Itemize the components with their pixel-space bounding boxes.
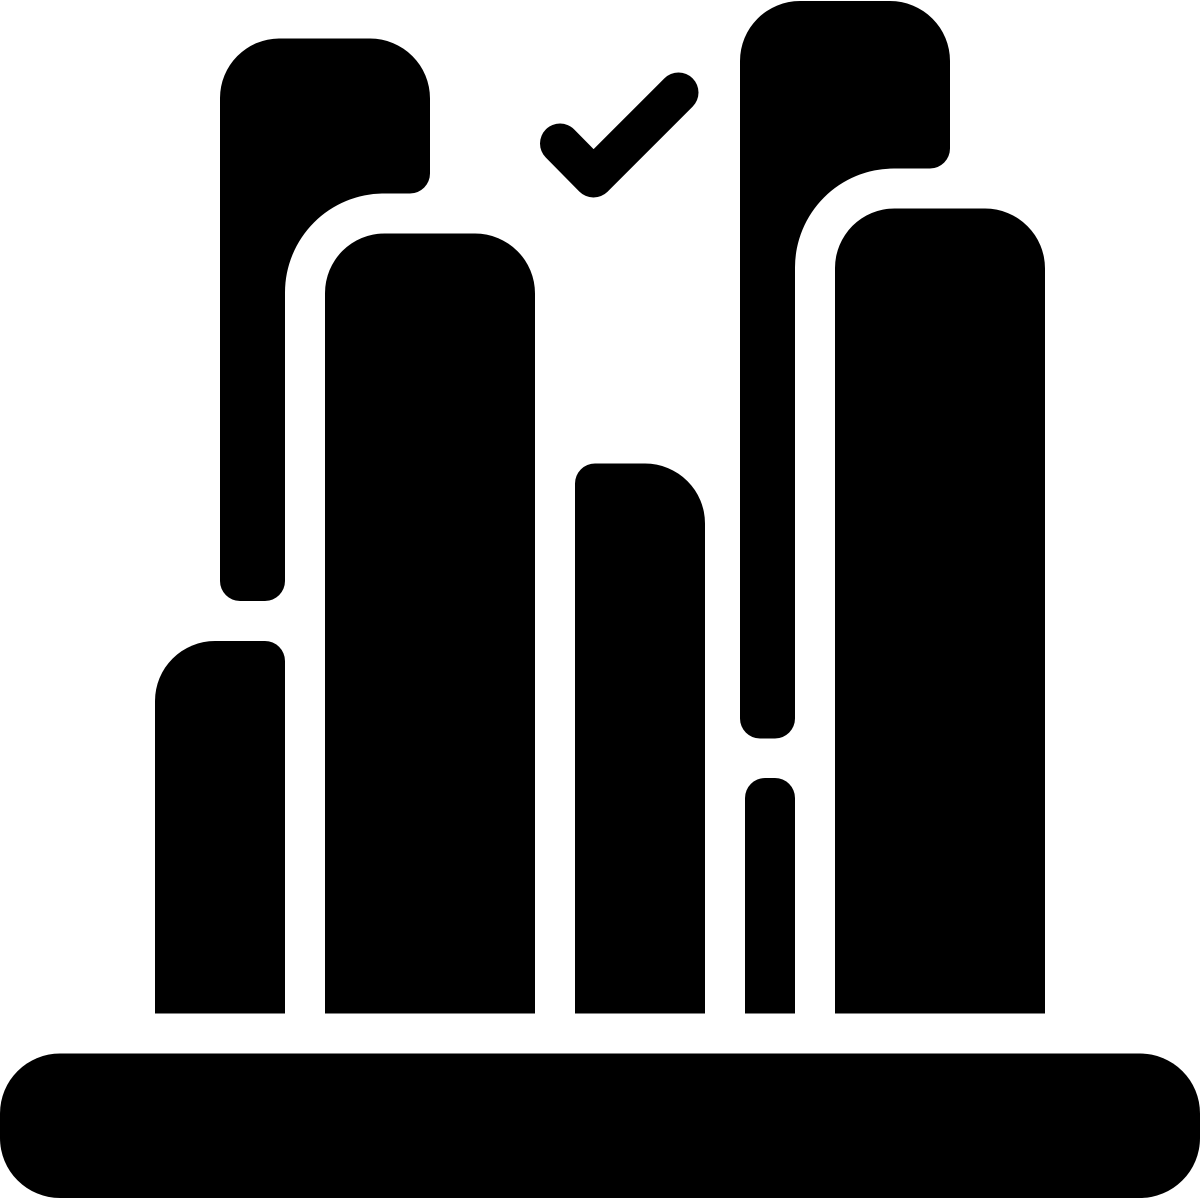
bar: tall second [325,234,535,1014]
bar: short left front [155,641,285,1014]
bar: right back [740,1,950,738]
bar: left back [220,38,430,601]
bar: middle [575,464,705,1014]
base platform [0,1054,1200,1198]
icon: check mark [560,92,678,178]
bar: small right front [745,778,795,1014]
bar: tall right [835,208,1045,1014]
